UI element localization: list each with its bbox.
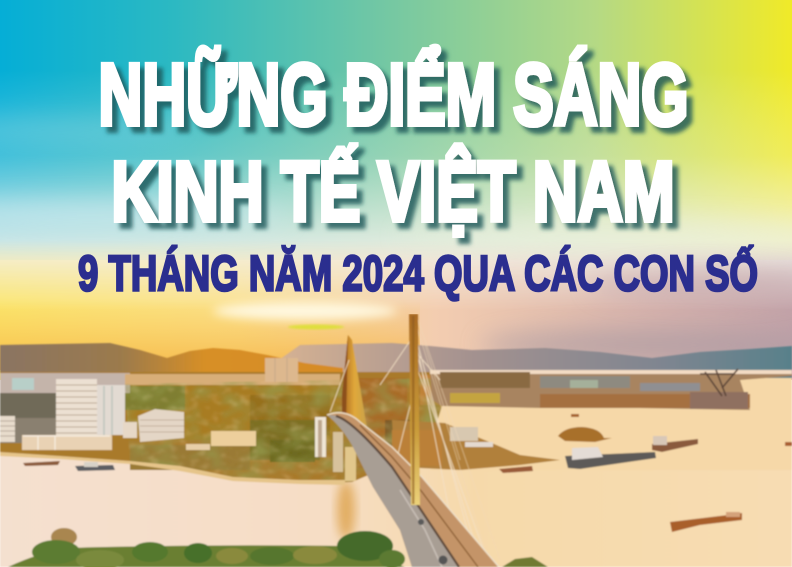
pylon 2 bbox=[409, 314, 420, 505]
landscape scene bbox=[0, 314, 792, 567]
main title bbox=[98, 46, 688, 238]
boats and islet bbox=[23, 414, 792, 532]
green hills left bbox=[0, 343, 343, 400]
cables bbox=[330, 330, 490, 567]
city on left bank bbox=[0, 358, 442, 485]
bridge deck bbox=[327, 413, 499, 567]
port cranes bbox=[700, 369, 738, 396]
shore strip bbox=[0, 452, 345, 485]
tall tower bbox=[56, 379, 125, 450]
middle bank beneath bridge bbox=[392, 420, 560, 470]
bridge bbox=[327, 314, 500, 567]
sun glow cloud bbox=[213, 302, 397, 320]
bridge pier and pylon 1 bbox=[333, 335, 367, 481]
water bbox=[0, 450, 792, 567]
right far shore with port bbox=[430, 369, 792, 410]
sky background bbox=[0, 0, 792, 380]
distant mountains bbox=[262, 343, 792, 378]
low buildings bbox=[22, 435, 112, 450]
foreground trees bbox=[8, 528, 548, 567]
